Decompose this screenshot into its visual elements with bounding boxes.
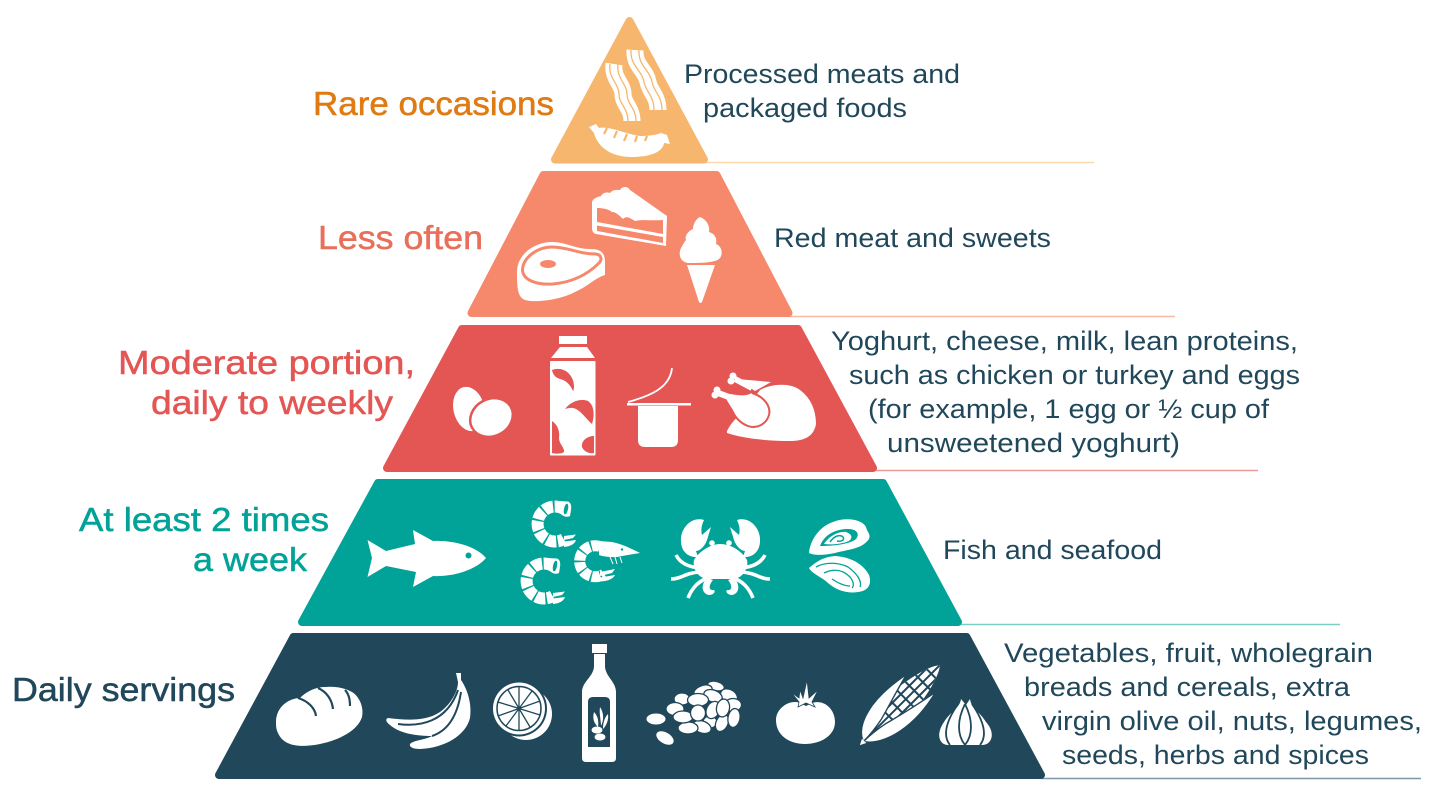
category label: at least 2 times a week: a week [193,541,308,578]
icon: cake slice [592,187,667,246]
icon: crab [671,519,770,598]
icon: garlic [939,699,992,745]
icon: fish [368,530,486,587]
icon: eggs [449,383,520,444]
description: dairy and lean proteins: Yoghurt, cheese, milk, lean proteins, [831,326,1298,356]
tier shape: fourth trapezoid [302,483,958,622]
description: fish and seafood: Fish and seafood [943,535,1162,565]
icon: shrimp bottom [527,558,565,604]
category label: moderate portion: daily to weekly [151,384,394,421]
icon: ice cream cone [680,217,722,303]
tier: less often [318,175,1175,316]
icon: roast chicken [712,372,816,441]
tier shape: second trapezoid [472,175,788,313]
description: dairy and lean proteins: (for example, 1 egg or ½ cup of [868,394,1270,424]
icon: orange [491,680,552,740]
tier: at least 2 times a week [79,483,1340,624]
category label: moderate portion [118,344,415,421]
category label: at least 2 times a week: At least 2 times [79,501,329,538]
description: dairy and lean proteins: such as chicken or turkey and eggs [849,360,1300,390]
tier: daily servings [12,637,1422,778]
description: vegetables and grains [1004,638,1422,770]
category label: less often: Less often [318,219,483,256]
description: dairy and lean proteins [831,326,1300,458]
icon: oysters [809,519,870,592]
category label: at least 2 times a week [79,501,329,578]
description: vegetables and grains: breads and cereals, extra [1024,672,1350,702]
category label: moderate portion: Moderate portion, [118,344,415,381]
icon: steak [517,242,605,301]
icon: olive oil bottle [582,644,616,762]
icon: legumes [646,679,742,748]
icon: shrimp top [538,501,576,547]
description: vegetables and grains: seeds, herbs and spices [1062,740,1369,770]
icon: tomato [776,680,835,744]
description: red meat and sweets: Red meat and sweets [774,223,1051,253]
icon: bananas [386,673,471,749]
icon: shrimp right [580,541,640,582]
tier: rare occasions [313,21,1094,162]
icon: corn cob [860,665,940,746]
description: dairy and lean proteins: unsweetened yoghurt) [887,428,1180,458]
icon: bacon [610,50,662,121]
description: vegetables and grains: Vegetables, fruit, wholegrain [1004,638,1373,668]
description: processed meats: Processed meats and [684,59,960,89]
tier shape: base trapezoid [219,637,1041,775]
tier shape: third trapezoid [387,329,873,468]
description: processed meats [684,59,960,123]
category label: rare occasions: Rare occasions [313,85,554,122]
icon: bread loaf [276,687,363,746]
icon: sausage [589,124,670,157]
description: processed meats: packaged foods [703,93,907,123]
icon: milk carton [550,336,596,456]
category label: daily servings: Daily servings [12,671,235,708]
icon: yoghurt pot [627,368,691,447]
tier: moderate portion [118,326,1300,470]
tier shape: top triangle [555,21,704,160]
description: vegetables and grains: virgin olive oil, nuts, legumes, [1042,706,1422,736]
